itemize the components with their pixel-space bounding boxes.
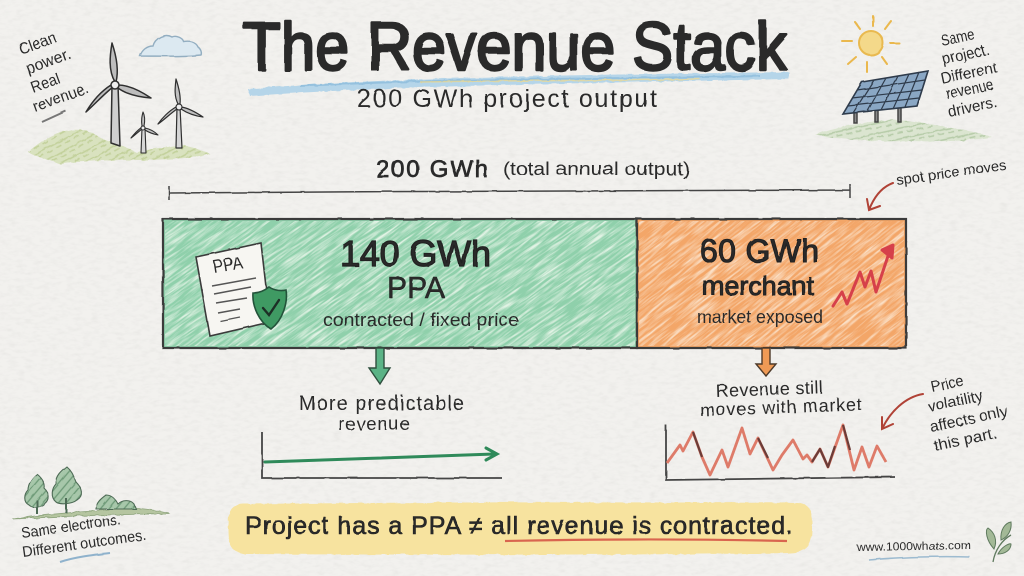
axes bbox=[262, 432, 502, 478]
text: merchant: merchant bbox=[702, 271, 814, 301]
hills bbox=[28, 130, 210, 164]
shield bbox=[253, 287, 286, 329]
heading: 60 GWh: 60 GWh bbox=[700, 233, 819, 269]
note: same project: Same bbox=[939, 26, 976, 50]
text: revenue still moves with market bbox=[699, 377, 862, 420]
total output label: 200 GWh bbox=[376, 156, 488, 183]
total output label: (total annual output) bbox=[503, 159, 690, 179]
label: this part. bbox=[932, 425, 998, 455]
arrow bbox=[882, 394, 923, 429]
icon: PPA document with shield bbox=[196, 243, 286, 336]
axes bbox=[666, 425, 895, 480]
underline bbox=[505, 540, 787, 541]
note: same electrons: Same electrons. bbox=[20, 511, 122, 542]
medium turbine bbox=[158, 79, 203, 148]
text: revenue still moves with market: Revenue still bbox=[715, 377, 823, 401]
trees bbox=[25, 467, 136, 514]
title: The Revenue Stack bbox=[243, 9, 788, 85]
note: same project: project. bbox=[940, 41, 991, 68]
document: PPA bbox=[211, 253, 244, 277]
note: price volatility bbox=[882, 372, 1009, 455]
callout: key takeaway bbox=[228, 502, 812, 555]
text: more predictable revenue: revenue bbox=[338, 413, 410, 434]
label: spot price moves bbox=[895, 158, 1007, 189]
text: more predictable revenue: More predictable bbox=[299, 393, 464, 415]
big turbine bbox=[86, 43, 151, 146]
arrow bbox=[867, 183, 893, 210]
note: same electrons bbox=[20, 511, 147, 562]
heading: 140 GWh: 140 GWh bbox=[340, 233, 491, 274]
subtitle: 200 GWh project output bbox=[357, 85, 657, 113]
note: same project bbox=[939, 26, 999, 121]
label bbox=[926, 372, 1009, 455]
icon: leaf sprig bbox=[986, 522, 1011, 562]
text: market exposed: market exposed bbox=[697, 307, 823, 327]
text: contracted: contracted / fixed price bbox=[323, 310, 519, 330]
line bbox=[265, 448, 497, 462]
text: PPA: PPA bbox=[387, 270, 445, 305]
highlighter band bbox=[228, 502, 812, 555]
icon: trees and shrubs bbox=[13, 467, 170, 519]
panel: merchant segment bbox=[635, 217, 908, 350]
chart: stable revenue bbox=[262, 432, 502, 478]
grass bbox=[815, 120, 992, 141]
icon: solar panel on grass bbox=[815, 71, 992, 141]
ground bbox=[13, 508, 170, 519]
note: same project: Different bbox=[939, 59, 999, 88]
span bracket bbox=[169, 184, 850, 200]
label: volatility bbox=[926, 388, 985, 416]
text: Project has a PPA ≠ all revenue is contracted. bbox=[245, 512, 793, 540]
note: same electrons: Different outcomes. bbox=[21, 527, 147, 561]
note: clean power bbox=[17, 29, 91, 122]
note: clean power: revenue. bbox=[31, 80, 91, 116]
panel legs bbox=[854, 107, 901, 123]
panel: PPA segment bbox=[161, 217, 638, 350]
icon: rising price arrow bbox=[833, 245, 893, 306]
label: Price bbox=[929, 372, 965, 396]
website footer bbox=[856, 540, 971, 560]
icon: wind turbines on hill bbox=[28, 43, 210, 164]
stacked bar bbox=[161, 217, 908, 350]
note: same project: revenue bbox=[944, 76, 995, 103]
label: affects only bbox=[928, 403, 1009, 436]
volatile line bbox=[667, 425, 886, 475]
arrow: PPA down bbox=[369, 348, 390, 384]
chart: volatile revenue bbox=[666, 425, 895, 480]
note: clean power: Clean bbox=[17, 29, 59, 59]
website footer: www.1000whats.com bbox=[856, 540, 971, 554]
icon: cloud bbox=[140, 36, 201, 56]
icon: sun bbox=[842, 16, 899, 72]
note: clean power: power. bbox=[24, 46, 74, 78]
text: more predictable revenue bbox=[299, 393, 464, 434]
note: same project: drivers. bbox=[946, 94, 999, 121]
title underline: blue crayon bbox=[248, 72, 789, 96]
text: revenue still moves with market: moves with market bbox=[699, 394, 862, 420]
note: clean power: Real bbox=[29, 71, 63, 97]
small turbine bbox=[131, 112, 158, 153]
spot price callout bbox=[867, 158, 1007, 210]
total output label bbox=[376, 156, 690, 183]
arrow: merchant down bbox=[756, 348, 776, 376]
panel face bbox=[843, 71, 928, 114]
